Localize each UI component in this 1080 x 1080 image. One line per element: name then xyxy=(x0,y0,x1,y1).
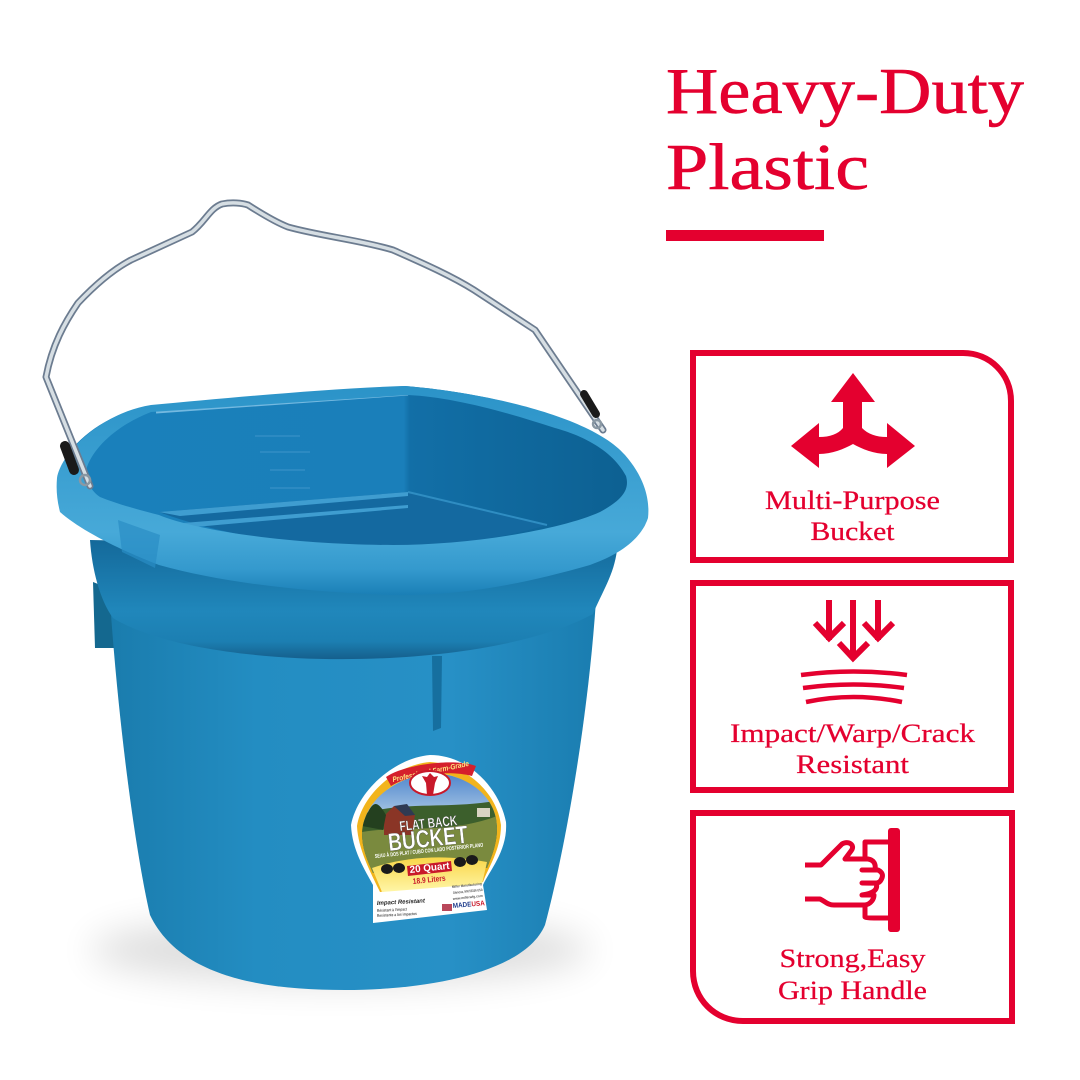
label scene xyxy=(362,774,497,873)
label size: 20 Quart xyxy=(409,861,451,876)
panel text xyxy=(778,944,927,1005)
panel text: Resistant xyxy=(796,750,910,779)
panel border xyxy=(693,583,1011,790)
bucket body xyxy=(110,600,596,990)
panel text: Impact/Warp/Crack xyxy=(730,719,975,748)
inner floor xyxy=(159,492,547,548)
label size: 18.9 Liters xyxy=(412,874,446,886)
panel text: Multi-Purpose xyxy=(765,486,940,515)
icon: impact arrows on layers xyxy=(801,600,907,702)
label product name xyxy=(387,812,469,857)
bucket product image xyxy=(46,203,648,990)
side rib xyxy=(432,656,442,731)
panel border xyxy=(693,353,1011,560)
label subtitle: SEAU À DOS PLAT / CUBO CON LADO POSTERIOR PLANO xyxy=(374,842,484,860)
label yellow panel xyxy=(372,857,487,892)
ground shadow xyxy=(90,916,590,984)
icon: three-way arrows xyxy=(791,373,915,468)
label logo xyxy=(410,771,450,795)
label footer: www.millerwfg.com xyxy=(452,894,483,901)
label footer: Miller Manufacturing xyxy=(452,882,482,889)
label product name: FLAT BACK xyxy=(399,812,458,834)
label footer xyxy=(377,882,485,918)
label backing xyxy=(351,755,506,923)
label footer: MADEUSA xyxy=(453,900,485,910)
panel: impact resistant xyxy=(693,583,1011,790)
icon: hand gripping handle xyxy=(805,828,900,932)
title xyxy=(666,55,1024,204)
panel text xyxy=(765,486,940,546)
panel text xyxy=(730,719,975,779)
label footer: Resistente a los impactos xyxy=(377,911,418,918)
rim highlight back xyxy=(156,394,408,412)
label size xyxy=(407,861,452,886)
panel text: Grip Handle xyxy=(778,976,927,1005)
label yellow border xyxy=(357,762,501,892)
panel text: Bucket xyxy=(810,517,895,546)
panel text: Strong,Easy xyxy=(780,944,926,973)
label footer: Résistant à l'impact xyxy=(377,906,408,913)
panel: multi-purpose bucket xyxy=(693,353,1011,560)
title: Plastic xyxy=(666,131,869,204)
label banner: Professional Farm-Grade xyxy=(392,759,470,784)
label product name: BUCKET xyxy=(387,821,469,857)
panel border xyxy=(693,813,1012,1021)
bucket rim xyxy=(57,386,648,595)
panel: easy grip handle xyxy=(693,813,1012,1021)
label footer: Glencoe, MN 55336 USA xyxy=(453,888,483,895)
label footer: Impact Resistant xyxy=(377,898,426,907)
inner back wall marks xyxy=(255,436,310,488)
title: Heavy-Duty xyxy=(666,55,1024,128)
bucket inner xyxy=(60,386,648,585)
title underline xyxy=(666,230,824,241)
left hook xyxy=(93,582,114,648)
rim seam xyxy=(118,520,160,568)
label animals xyxy=(381,855,478,874)
product label xyxy=(351,755,506,923)
upper band xyxy=(90,540,617,659)
handle clips xyxy=(65,394,601,485)
metal handle xyxy=(46,203,603,486)
